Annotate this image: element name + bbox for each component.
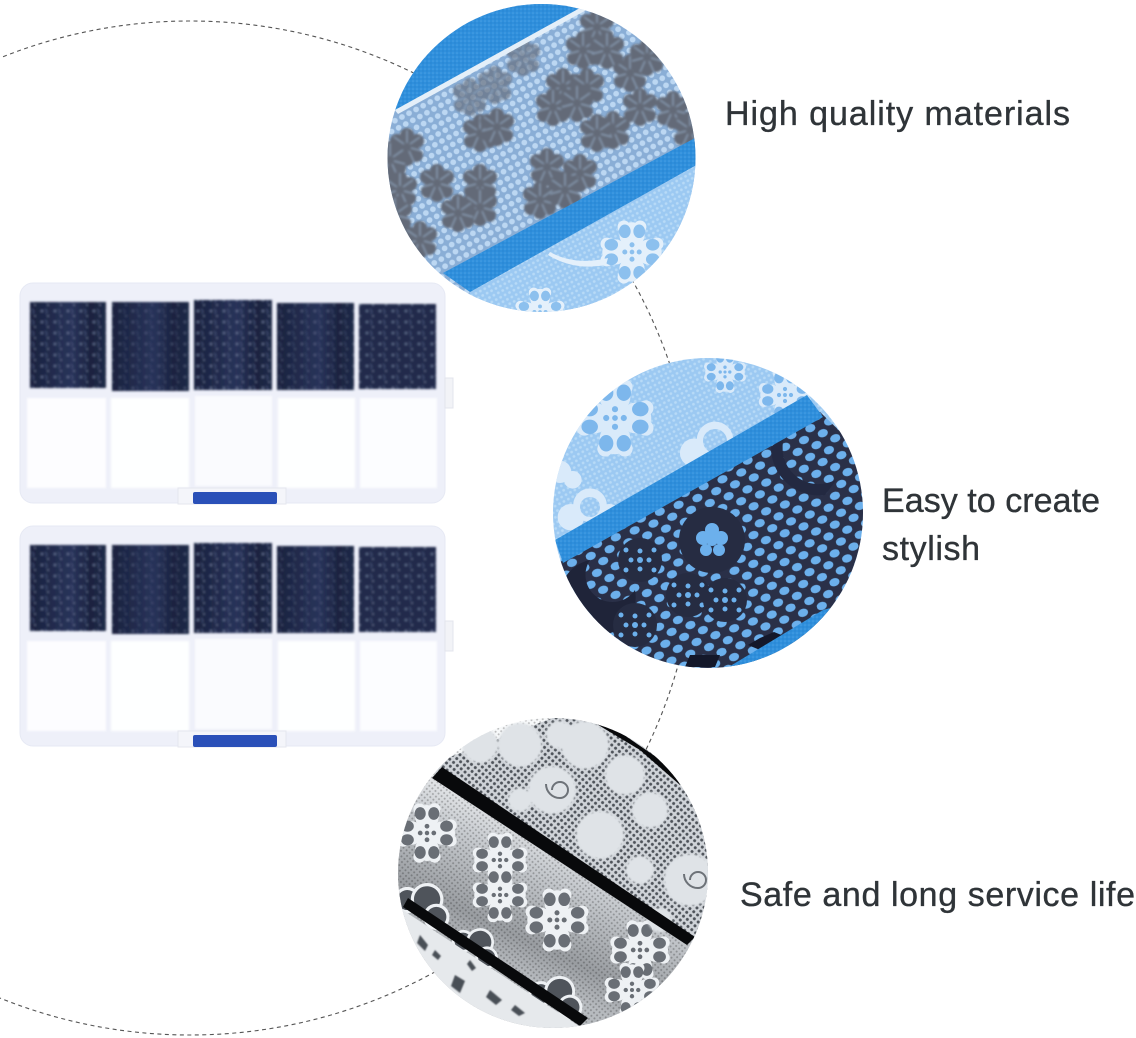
feature label: Easy to create stylish <box>882 482 1100 568</box>
white flowers <box>397 803 670 1017</box>
black diagonal bands <box>403 720 695 1026</box>
detail circle 1: dark lace on blue <box>388 4 696 312</box>
white lace flower <box>516 220 664 312</box>
box shell <box>20 526 445 746</box>
blue latch <box>178 731 286 747</box>
lace inside clouds <box>580 429 727 517</box>
upper lace panel <box>434 718 708 936</box>
dark foil rolls row <box>30 300 436 391</box>
lower-left lace panel <box>402 910 578 1028</box>
pale lace panel <box>553 358 863 668</box>
middle blue band <box>443 138 700 292</box>
white lace flowers <box>556 358 811 530</box>
diagonal blue band <box>555 395 823 563</box>
detail circle 2: black lace on blue <box>553 358 863 668</box>
black lace panel <box>560 412 863 668</box>
lace medallions <box>560 435 837 667</box>
blue latch <box>178 488 286 504</box>
scalloped lace edge along lower band <box>399 883 582 1020</box>
feature label: High quality materials: High quality materials <box>725 95 1070 133</box>
side tab <box>445 621 453 651</box>
detail circle 3: white lace on black <box>398 718 708 1028</box>
feature label: Safe and long service life: Safe and long service life <box>740 876 1135 914</box>
dark foil rolls row <box>30 543 436 634</box>
blue strip at bottom right <box>729 608 830 667</box>
swirl details <box>546 782 706 888</box>
white foil rolls row <box>27 639 437 731</box>
feature label: Easy to create stylish: Easy to create <box>882 482 1100 520</box>
dashed guide circle <box>0 21 697 1035</box>
upper pale lace blobs <box>462 721 716 932</box>
lower pale lace panel <box>470 166 696 312</box>
product box: top <box>20 283 453 504</box>
product box: bottom <box>20 526 453 747</box>
white foil rolls row <box>27 396 437 488</box>
top blue band <box>395 4 579 110</box>
lace mesh strip <box>388 4 696 312</box>
box shell <box>20 283 445 503</box>
lower-left dark flecks <box>417 935 525 1016</box>
gray lace flowers <box>373 8 707 259</box>
feature label: Easy to create stylish: stylish <box>882 530 980 568</box>
side tab <box>445 378 453 408</box>
middle lace panel <box>398 748 704 1028</box>
